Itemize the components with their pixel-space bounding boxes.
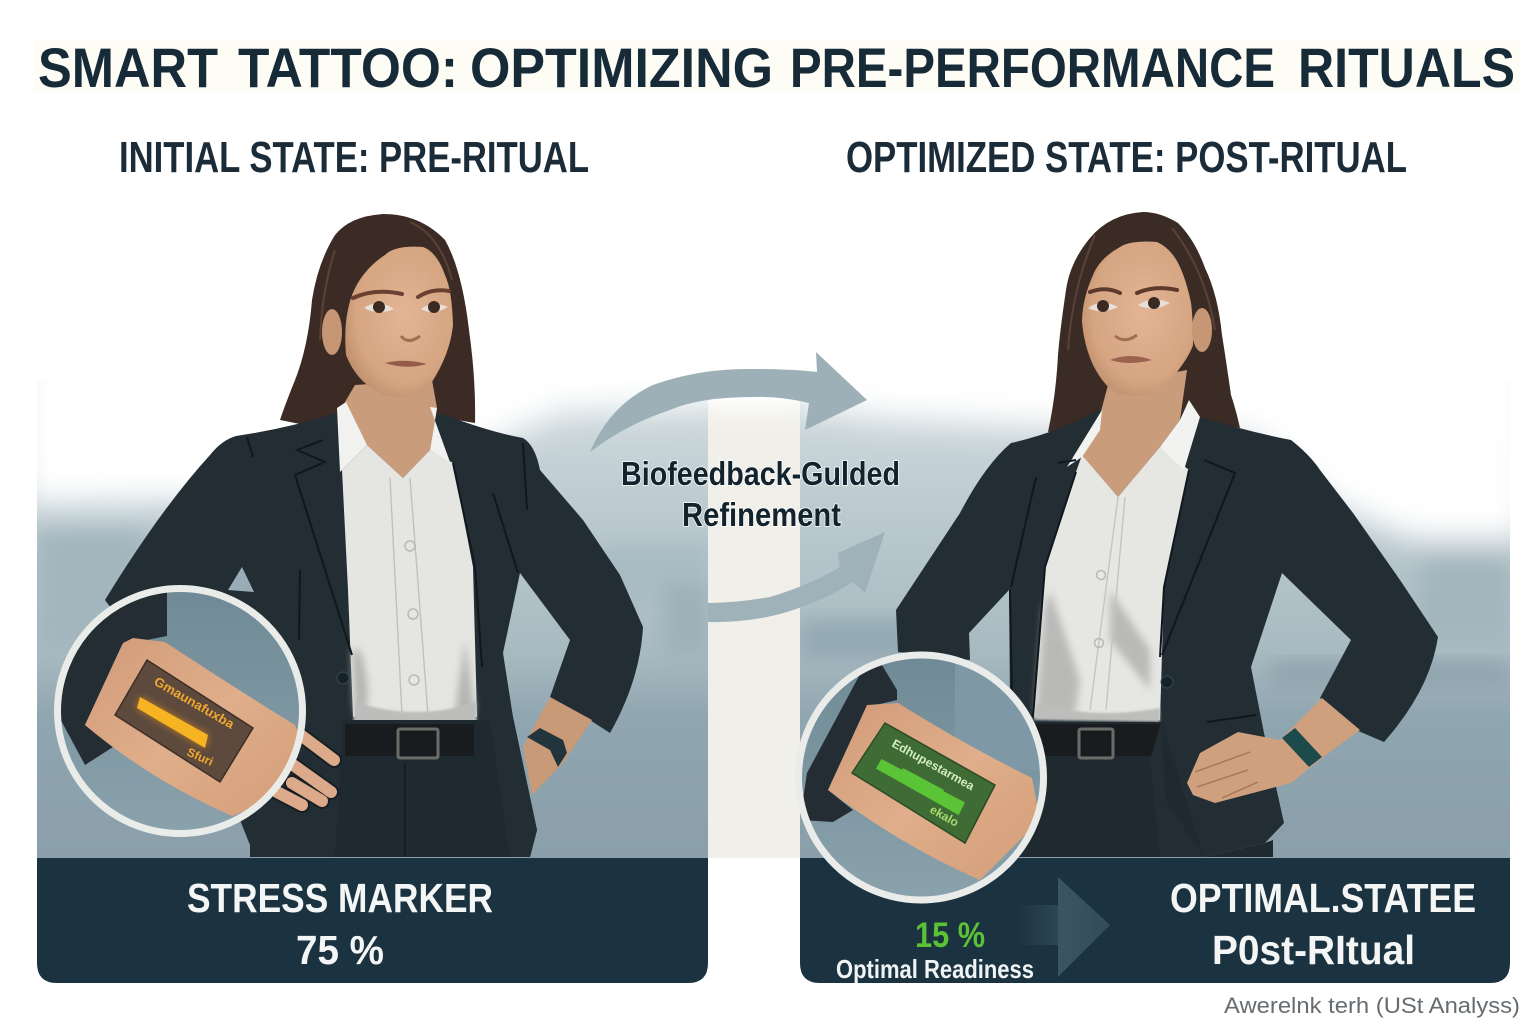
title [34, 36, 1520, 99]
footer panel: optimal state [800, 858, 1510, 984]
optimal state label: OPTIMAL.STATEE [1170, 875, 1476, 921]
center strip background [708, 402, 800, 858]
collar [1067, 400, 1200, 470]
title: TATTOO: [238, 36, 458, 99]
heading: initial state: INITIAL STATE: PRE-RITUAL [119, 133, 589, 182]
person: post-ritual [896, 212, 1438, 857]
shirt [342, 445, 477, 722]
jacket button [1161, 676, 1173, 688]
label: biofeedback refinement: Refinement [682, 496, 841, 533]
lapels [1010, 460, 1256, 722]
title: RITUALS [1298, 36, 1515, 99]
orange tattoo patch [115, 660, 253, 782]
title: OPTIMIZING [470, 36, 773, 99]
collar [337, 402, 450, 472]
readiness value: 15 % [915, 916, 985, 955]
right hand and wristband [1187, 698, 1360, 803]
orange tattoo patch: Sfuri [185, 745, 215, 769]
arrow: footer chevron [1015, 877, 1110, 977]
panel: right office background [800, 401, 1510, 858]
inset: stress tattoo on arm [50, 588, 310, 834]
trousers [335, 717, 537, 857]
title: SMART [38, 36, 218, 99]
right forearm and wristband [523, 697, 592, 795]
fingers [277, 733, 334, 805]
post-ritual label: P0st-RItual [1212, 927, 1415, 973]
stress marker value: 75 % [296, 927, 384, 973]
jacket [105, 412, 643, 857]
green tattoo patch [852, 723, 995, 843]
arrow: upper biofeedback arrow [590, 352, 867, 452]
inset: optimal tattoo on arm [798, 650, 1050, 900]
neck [345, 380, 437, 478]
face [320, 222, 453, 397]
green tattoo patch: Edhupestarmea [890, 736, 977, 793]
readiness label: Optimal Readiness [836, 954, 1034, 984]
label: biofeedback refinement: Biofeedback-Gulded [621, 455, 900, 492]
label: biofeedback refinement [621, 455, 900, 533]
face [1068, 228, 1215, 396]
jacket [896, 408, 1438, 857]
armpit gap [228, 567, 254, 592]
jacket button [337, 672, 349, 684]
arrow: lower biofeedback arrow [708, 532, 885, 622]
source credit: Awerelnk terh (USt Analyss) [1224, 993, 1520, 1018]
title: PRE-PERFORMANCE [790, 36, 1275, 99]
heading: optimized state: OPTIMIZED STATE: POST-RITUAL [846, 133, 1407, 182]
neck [1082, 370, 1187, 497]
trousers [1010, 720, 1273, 857]
orange tattoo patch: Gmaunafuxba [152, 674, 238, 732]
stress marker label: STRESS MARKER [187, 875, 493, 921]
shirt [1033, 447, 1189, 722]
green tattoo patch: ekalo [928, 802, 961, 830]
person: pre-ritual [105, 214, 643, 857]
hair back [1048, 212, 1240, 432]
footer panel: stress marker [37, 858, 708, 983]
panel: left office background [37, 394, 708, 858]
hair back [280, 214, 475, 424]
lapels [247, 437, 527, 667]
